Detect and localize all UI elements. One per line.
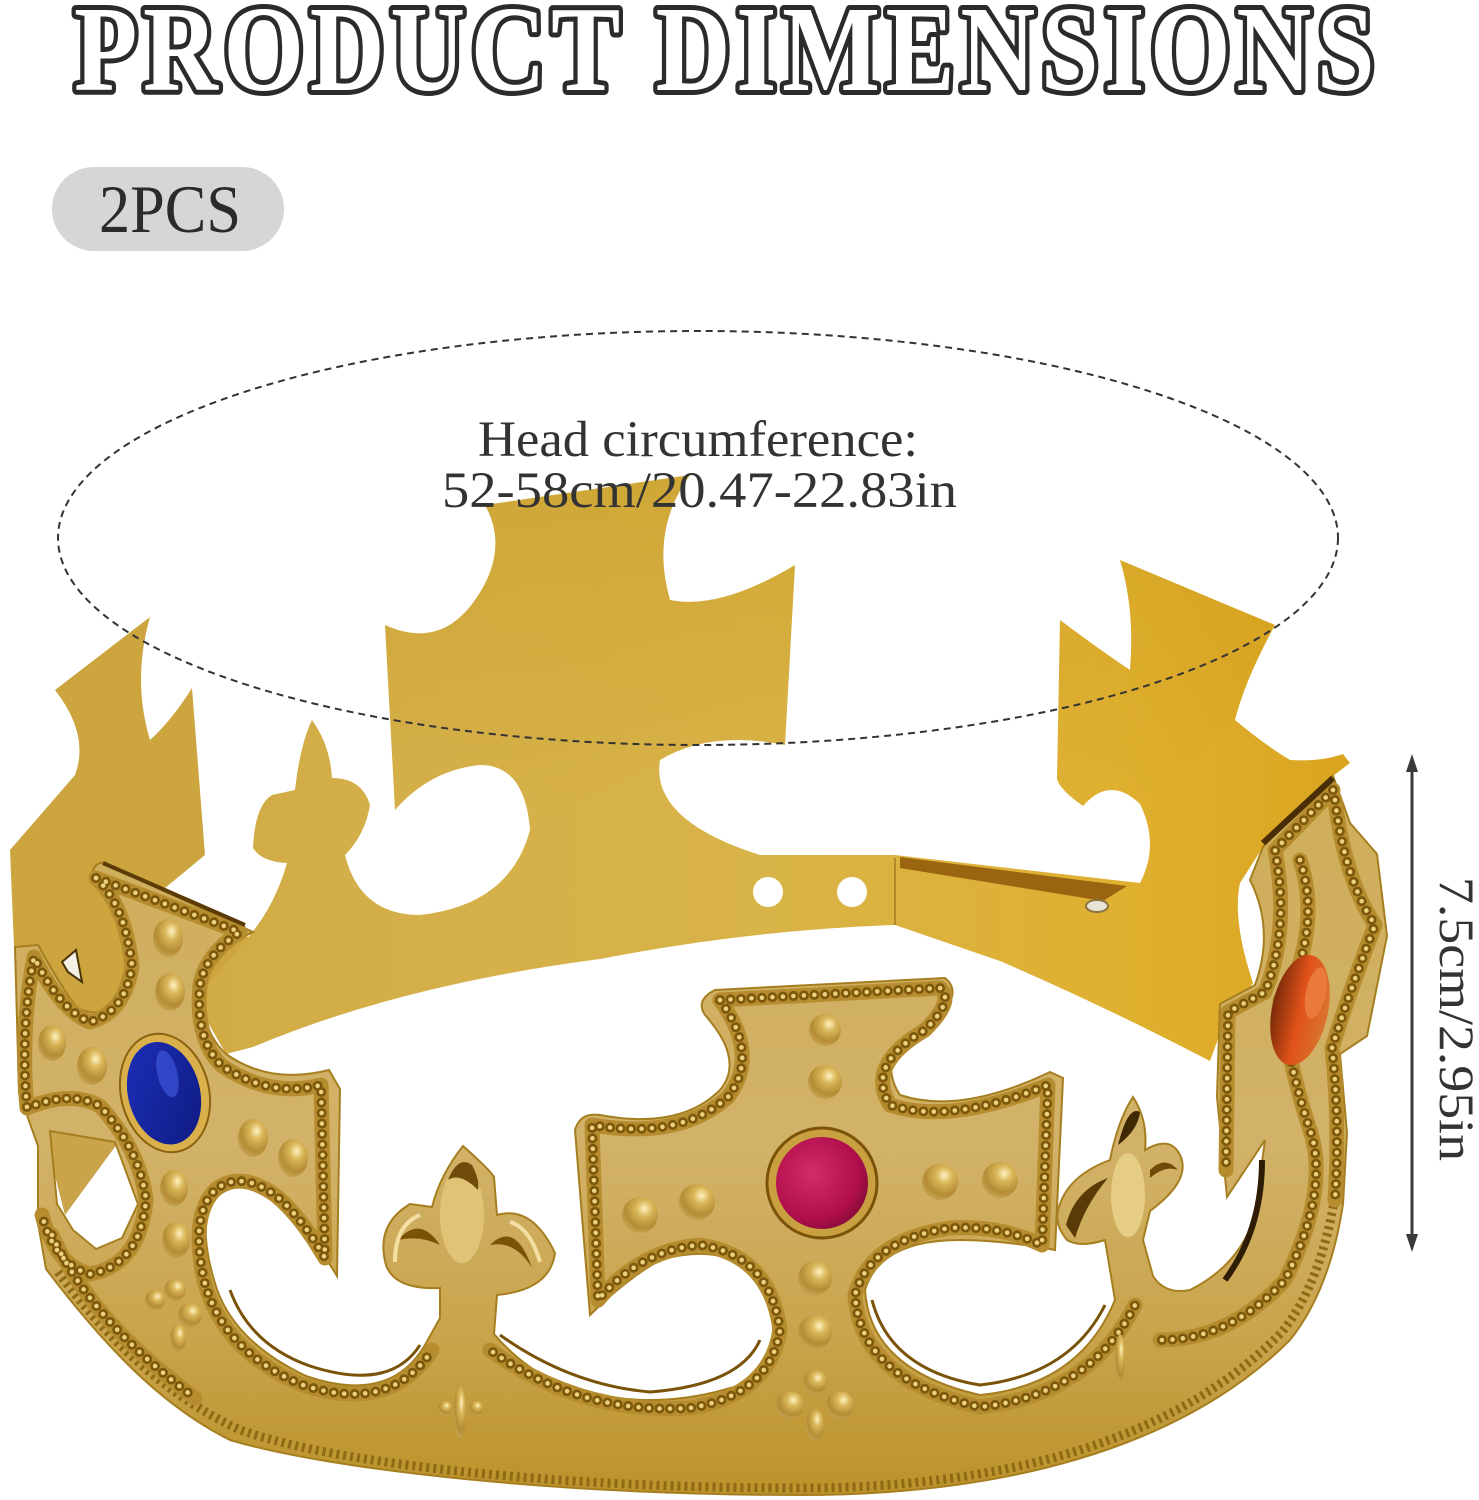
crown: right fleur-de-lis highlights	[1066, 1111, 1178, 1238]
crown: small fleur studs	[145, 1279, 1125, 1441]
crown: top edge shadow on left cross	[103, 863, 245, 925]
quantity badge: 2PCS	[99, 171, 241, 247]
crown: strap holes	[753, 877, 867, 907]
crown: back cross shading	[385, 475, 1275, 830]
head circumference label: Head circumference:	[478, 412, 918, 468]
crown: beaded edging ridge	[25, 790, 1375, 1409]
crown: centre cross studs	[622, 1014, 1018, 1349]
crown: strap slot	[900, 857, 1127, 901]
crown: dark arch shadows	[230, 1160, 1262, 1392]
gem: blue	[108, 1024, 222, 1162]
head circumference dashed ellipse	[58, 331, 1338, 745]
crown: beaded edging dark	[25, 790, 1375, 1409]
height arrow	[1406, 754, 1418, 1252]
crown: strap seam	[894, 858, 896, 925]
crown illustration	[10, 475, 1387, 1495]
crown: beaded edging light	[25, 790, 1375, 1409]
crown: left fleur-de-lis highlights	[395, 1162, 540, 1268]
head circumference label: 52-58cm/20.47-22.83in	[442, 463, 957, 519]
crown: top edge shadow on right cross	[1263, 778, 1333, 843]
crown: left cross studs	[38, 919, 308, 1258]
gem: orange	[1261, 949, 1339, 1071]
crown: inner wedge behind left cross	[42, 1125, 120, 1215]
quantity badge	[52, 167, 284, 251]
crown: lower rim hatching	[58, 1190, 1336, 1488]
crown: back band with crosses	[195, 475, 1350, 1061]
crown: far left cross	[10, 617, 253, 1060]
head circumference label	[442, 412, 957, 519]
crown: small diamond cut-out	[62, 950, 82, 982]
crown: front band and crosses	[15, 776, 1387, 1495]
crown: strap rivet	[1086, 900, 1108, 912]
gem: red	[767, 1128, 877, 1238]
